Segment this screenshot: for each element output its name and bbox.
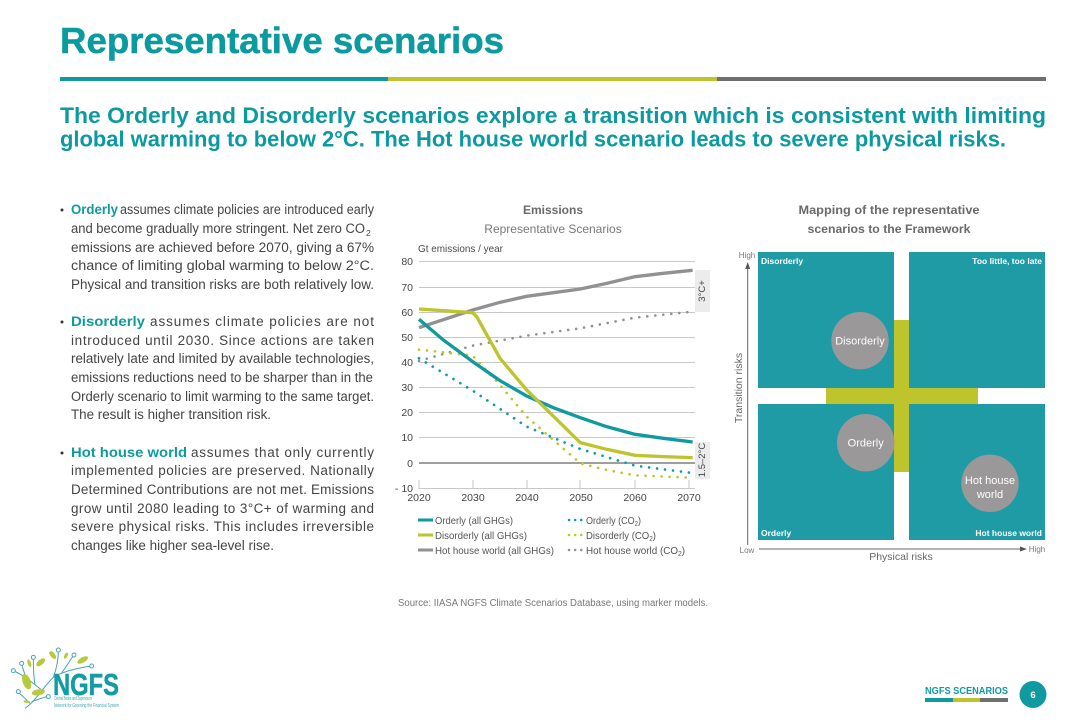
y axis labels: 0 bbox=[407, 458, 413, 470]
bubble: Disorderly: Disorderly bbox=[835, 336, 885, 348]
chart legend: 2 bbox=[649, 536, 653, 543]
y axis labels: 20 bbox=[401, 407, 413, 419]
x axis labels bbox=[407, 492, 701, 504]
icon: branch bbox=[11, 648, 94, 708]
chart legend: Hot house world (all GHGs) bbox=[435, 545, 554, 557]
text block: Orderly bbox=[60, 202, 374, 292]
y axis labels: 40 bbox=[401, 357, 413, 369]
axis: physical risks: High bbox=[1029, 545, 1045, 554]
text block: Hot house world: implemented policies are preserved. Nationally bbox=[71, 463, 374, 478]
text block: Hot house world: assumes that only currently bbox=[191, 445, 374, 460]
line chart: emissions: Gt emissions / year bbox=[418, 243, 503, 255]
framework heading: Mapping of the representative bbox=[798, 203, 980, 217]
chart legend: 2 bbox=[678, 551, 682, 558]
text block: Hot house world: grow until 2080 leading to 3°C+ of warming and bbox=[71, 501, 374, 516]
text block: Disorderly: relatively late and limited by available technologies, bbox=[71, 351, 374, 366]
axis: transition risks bbox=[733, 251, 755, 555]
text block: Disorderly: Orderly scenario to limit warming to the same target. bbox=[71, 389, 374, 404]
quadrant: Hot house world: Hot house world bbox=[975, 528, 1042, 538]
logo tagline: Network for Greening the Financial System bbox=[54, 703, 119, 709]
y axis labels: 80 bbox=[401, 256, 413, 268]
x axis labels: 2020 bbox=[407, 492, 431, 504]
text block: Hot house world bbox=[60, 445, 374, 553]
chart legend: ) bbox=[682, 545, 685, 557]
quadrant: Too little, too late: Too little, too late bbox=[972, 256, 1042, 266]
bubble: Orderly: Orderly bbox=[848, 438, 884, 450]
page number bbox=[1020, 681, 1046, 708]
bubble: Hot house world: Hot house bbox=[965, 475, 1015, 487]
band: 1.5-2C label bbox=[695, 442, 710, 479]
chart legend: ) bbox=[638, 515, 641, 527]
subtitle: global warming to below 2°C. The Hot house world scenario leads to severe physical risks. bbox=[60, 126, 1006, 152]
framework matrix bbox=[758, 252, 1045, 540]
chart heading: Emissions: Emissions bbox=[523, 203, 583, 217]
chart legend: Disorderly (all GHGs) bbox=[435, 530, 527, 542]
chart legend: Orderly (CO bbox=[586, 515, 643, 527]
chart legend: Disorderly (CO bbox=[586, 530, 655, 542]
page number: 6 bbox=[1030, 690, 1036, 701]
chart heading: Emissions bbox=[484, 203, 622, 236]
line chart: emissions bbox=[395, 243, 710, 504]
icon: leaves bbox=[20, 650, 89, 703]
text block: Disorderly bbox=[60, 314, 374, 422]
text block: Disorderly: Disorderly bbox=[71, 314, 146, 329]
source note: Source: IIASA NGFS Climate Scenarios Database, using marker models. bbox=[398, 598, 708, 609]
quadrant: Orderly bbox=[758, 404, 894, 540]
x axis labels: 2040 bbox=[515, 492, 539, 504]
text block: Orderly: and become gradually more stringent. Net zero CO bbox=[71, 221, 365, 236]
band: 3C+ label: 3°C+ bbox=[697, 280, 708, 302]
y axis labels: 60 bbox=[401, 307, 413, 319]
bubble: Hot house world: world bbox=[976, 489, 1003, 501]
quadrant: Orderly: Orderly bbox=[761, 528, 792, 538]
footer label bbox=[925, 686, 1008, 702]
text block: Hot house world: changes like higher sea-level rise. bbox=[71, 538, 274, 553]
chart legend: 2 bbox=[635, 521, 638, 528]
y axis labels bbox=[395, 256, 413, 495]
chart legend: Orderly (all GHGs) bbox=[435, 515, 513, 527]
framework heading bbox=[798, 203, 980, 236]
text block: Disorderly: assumes climate policies are not bbox=[150, 314, 374, 329]
x axis labels: 2050 bbox=[569, 492, 593, 504]
text block: Hot house world: Determined Contributions are not met. Emissions bbox=[71, 482, 374, 497]
band: 3C+ label bbox=[695, 270, 710, 312]
axis: transition risks: High bbox=[739, 251, 755, 260]
x axis labels: 2060 bbox=[623, 492, 647, 504]
text block: Orderly: Physical and transition risks are both relatively low. bbox=[71, 277, 374, 292]
text block: Orderly: assumes climate policies are introduced early bbox=[120, 202, 374, 217]
subtitle: The Orderly and Disorderly scenarios explore a transition which is consistent with limiting bbox=[60, 103, 1046, 128]
text block: Hot house world: severe physical risks. This includes irreversible bbox=[71, 519, 374, 534]
text block: Hot house world: Hot house world bbox=[71, 445, 187, 460]
text block: Disorderly: introduced until 2030. Since actions are taken bbox=[71, 333, 374, 348]
quadrant: Too little, too late bbox=[909, 252, 1045, 388]
framework heading: scenarios to the Framework bbox=[808, 222, 971, 236]
chart heading: Emissions: Representative Scenarios bbox=[484, 222, 622, 236]
axis: physical risks: Physical risks bbox=[869, 551, 933, 563]
band: 1.5-2C label: 1.5–2°C bbox=[697, 443, 708, 477]
bubble: Disorderly bbox=[831, 312, 889, 369]
x axis labels: 2030 bbox=[461, 492, 485, 504]
series lines bbox=[419, 270, 693, 478]
chart legend bbox=[418, 515, 685, 558]
axis: transition risks: Transition risks bbox=[733, 353, 745, 423]
y axis labels: 70 bbox=[401, 282, 413, 294]
logo wordmark: NGFS bbox=[53, 667, 119, 702]
subtitle bbox=[60, 103, 1046, 152]
text block: Orderly: Orderly bbox=[71, 202, 118, 217]
text block: Disorderly: emissions reductions need to be sharper than in the bbox=[71, 370, 373, 385]
y axis labels: 30 bbox=[401, 382, 413, 394]
text block: Disorderly: The result is higher transition risk. bbox=[71, 407, 271, 422]
cross bbox=[826, 320, 978, 472]
axis: physical risks bbox=[759, 545, 1045, 563]
quadrant: Disorderly: Disorderly bbox=[761, 256, 803, 266]
text block: Orderly: chance of limiting global warming to below 2°C. bbox=[71, 258, 374, 273]
quadrant: Hot house world bbox=[909, 404, 1045, 540]
logo tagline bbox=[54, 696, 119, 709]
chart legend: Hot house world (CO bbox=[586, 545, 684, 557]
title: Representative scenarios bbox=[60, 20, 504, 61]
logo: NGFS bbox=[11, 648, 119, 709]
footer label: NGFS SCENARIOS bbox=[925, 686, 1008, 697]
quadrant: Disorderly bbox=[758, 252, 894, 388]
chart legend: ) bbox=[653, 530, 656, 542]
y axis labels: - 10 bbox=[395, 483, 413, 495]
x axis labels: 2070 bbox=[677, 492, 701, 504]
y axis labels: 10 bbox=[401, 432, 413, 444]
bubble: Orderly bbox=[837, 414, 894, 471]
axis: transition risks: Low bbox=[740, 546, 755, 555]
bubble: Hot house world bbox=[961, 455, 1019, 512]
header rule bbox=[60, 77, 1046, 81]
text block: Orderly: emissions are achieved before 2070, giving a 67% bbox=[71, 240, 374, 255]
text block: Orderly: 2 bbox=[366, 228, 371, 238]
y axis labels: 50 bbox=[401, 332, 413, 344]
logo tagline: Central Banks and Supervisors bbox=[54, 696, 92, 702]
